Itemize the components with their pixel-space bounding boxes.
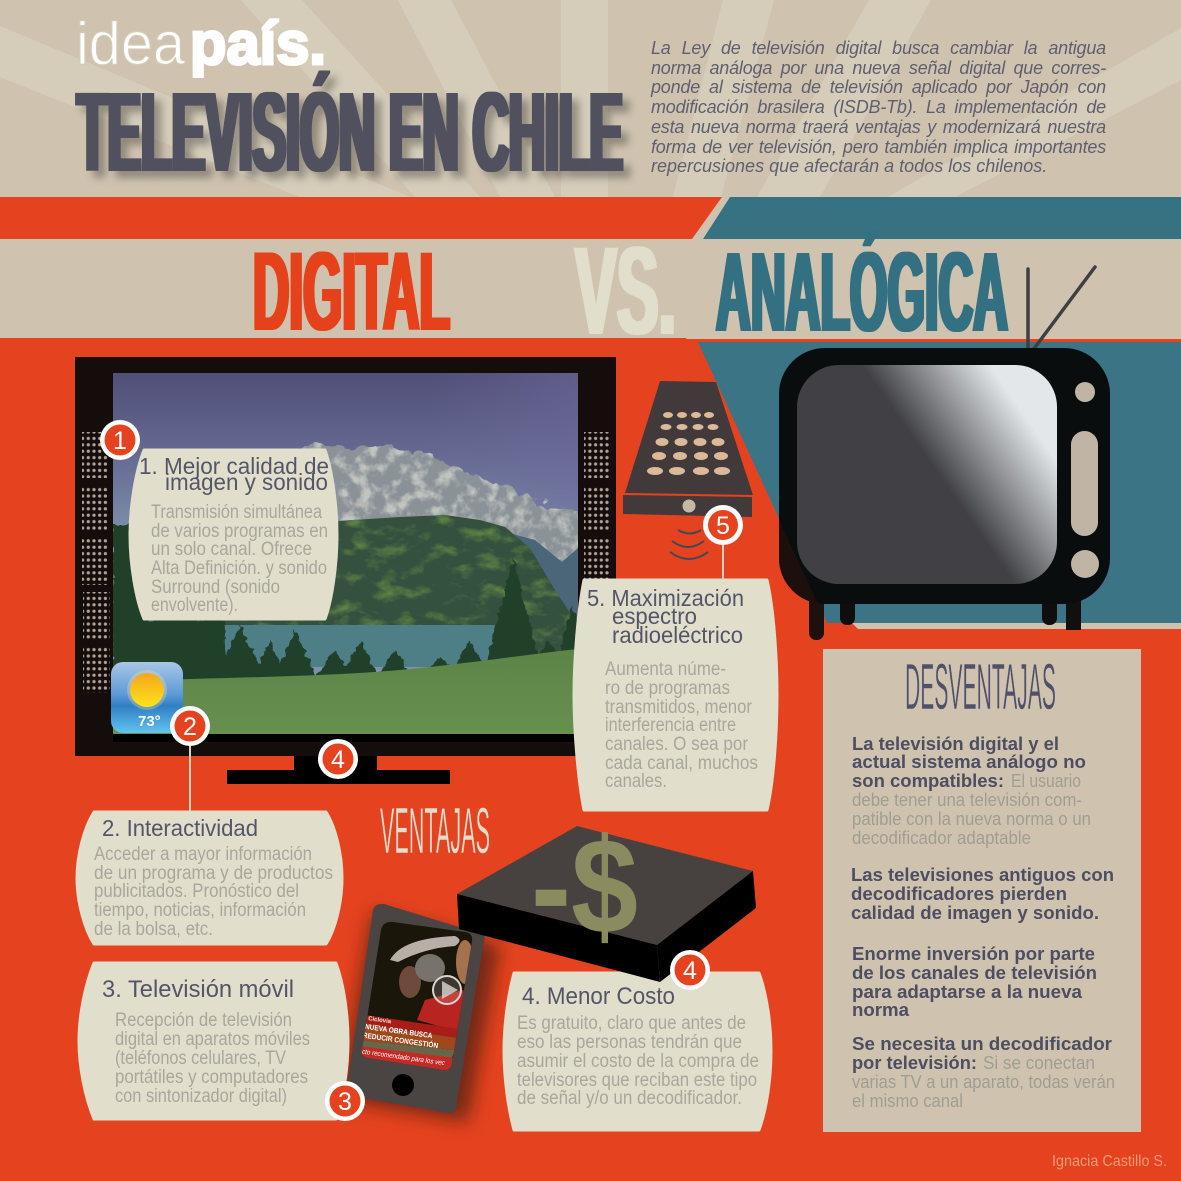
callout 5: maximizacion: canales. [605, 771, 667, 792]
callout 2: interactividad [77, 812, 342, 944]
trees [113, 525, 586, 690]
callout 3: television movil: digital en aparatos móviles [115, 1029, 310, 1050]
heading: vs: VS. [575, 222, 676, 361]
text: DIGITAL [253, 229, 450, 354]
text: compatibility: debe tener una televisión com- [852, 789, 1082, 810]
callout 2: interactividad: 2. Interactividad [102, 815, 258, 841]
phone screen video: NUEVA OBRA BUSCA [364, 1022, 434, 1040]
callout 3: television movil: 3. Televisión móvil [102, 976, 294, 1003]
icon: set-top box with price [457, 810, 756, 982]
callout 1: mejor calidad: un solo canal. Ofrece [151, 539, 312, 560]
band: orange and teal stripes [0, 197, 1181, 339]
speaker dots [82, 432, 611, 693]
callout 2: interactividad: Acceder a mayor información [94, 844, 312, 865]
text: decoder [852, 1033, 1115, 1111]
tv stand [227, 750, 450, 784]
tv body [779, 348, 1110, 604]
text: compatibility: son compatibles: [852, 770, 1004, 791]
callout 3: television movil [79, 963, 348, 1119]
tv screen landscape [113, 373, 590, 734]
lake [225, 625, 515, 667]
icon: mobile phone [340, 904, 500, 1122]
intro paragraph [650, 38, 1106, 176]
callout 5: maximizacion: ro de programas [605, 678, 730, 699]
mountain [113, 515, 578, 655]
callout 5: maximizacion: interferencia entre [605, 715, 736, 736]
callout 1: mejor calidad: 1. Mejor calidad de [139, 453, 329, 479]
callout 3: television movil: con sintonizador digital) [115, 1086, 287, 1107]
text: compatibility: actual sistema análogo no [852, 751, 1086, 772]
callout 4: menor costo: de señal y/o un decodificador. [517, 1088, 742, 1109]
callout 3: television movil: Recepción de televisión [115, 1010, 292, 1031]
badge 4 on box: 4 [683, 957, 697, 985]
intro paragraph: ponde al sistema de televisión aplicado por Japón con [651, 77, 1106, 97]
text: investment: Enorme inversión por parte [852, 943, 1095, 964]
intro paragraph: forma de ver televisión, pero también implica importantes [651, 137, 1106, 157]
logo: ideapaís: país. [190, 10, 326, 77]
intro paragraph: La Ley de televisión digital busca cambiar la antigua [651, 38, 1106, 58]
badge 5 [703, 505, 743, 545]
meadow [113, 649, 578, 734]
panel: desventajas [823, 649, 1141, 1132]
tv screen [797, 365, 1057, 584]
text: compatibility: La televisión digital y el [852, 733, 1059, 754]
remote signal waves [670, 530, 708, 559]
callout 4: menor costo: televisores que reciban este tipo [517, 1070, 757, 1091]
callout 5: maximizacion: transmitidos, menor [605, 697, 753, 718]
text: decoder: el mismo canal [852, 1090, 963, 1111]
text: image quality: calidad de imagen y sonido. [851, 902, 1099, 923]
text: decoder: por televisión: [852, 1052, 977, 1073]
callout 5: maximizacion: canales. O sea por [605, 734, 749, 755]
callout 4: menor costo: eso las personas tendrán que [517, 1032, 742, 1053]
callout 5: maximizacion: 5. Maximización [587, 585, 744, 611]
callout 2: interactividad: publicitados. Pronóstico del [94, 881, 299, 902]
callout 1: mejor calidad: imagen y sonido [165, 469, 328, 495]
clouds [302, 442, 578, 560]
callout 2: interactividad: tiempo, noticias, información [94, 900, 306, 921]
intro paragraph: esta nueva norma traerá ventajas y modernizará nuestra [651, 117, 1106, 137]
callout 4: menor costo: 4. Menor Costo [522, 983, 675, 1010]
badge 3 [325, 1081, 365, 1121]
callout 5: maximizacion [574, 580, 777, 810]
phone screen video: yecto recomendado para los vec [354, 1048, 446, 1067]
text: investment: norma [852, 999, 910, 1020]
icon: retro television [770, 267, 1110, 640]
badge 4 on tv: 4 [331, 746, 345, 774]
credit: Ignacia Castillo S. [1052, 1153, 1167, 1170]
icon: set-top box with price: -$ [531, 810, 638, 962]
badge 5: 5 [716, 512, 730, 540]
badge 4 on box [670, 950, 710, 990]
text: decoder: varias TV a un aparato, todas verán [852, 1071, 1115, 1092]
text: investment [852, 943, 1097, 1020]
tv legs [809, 590, 1081, 640]
icon: weather widget: 73° [138, 713, 161, 730]
callout 3: television movil: (teléfonos celulares, TV [115, 1048, 286, 1069]
callout 4: menor costo: asumir el costo de la compra de [517, 1051, 759, 1072]
badge 3: 3 [338, 1088, 352, 1116]
icon: weather widget [111, 662, 183, 733]
intro paragraph: norma análoga por una nueva señal digital que corres- [651, 58, 1106, 78]
badge 4 on tv [318, 739, 358, 779]
badge 1: 1 [113, 427, 127, 455]
callout 1: mejor calidad: Transmisión simultánea [151, 502, 322, 523]
intro paragraph: repercusiones que afectarán a todos los chilenos. [651, 156, 1047, 176]
header band [0, 0, 1181, 197]
background: orange and teal panels [0, 338, 1181, 1181]
callout 4: menor costo: Es gratuito, claro que antes de [517, 1013, 746, 1034]
text: investment: de los canales de televisión [852, 962, 1097, 983]
connector lines [190, 545, 723, 812]
callout 1: mejor calidad: Surround (sonido [151, 577, 280, 598]
badge 2 [170, 706, 210, 746]
phone screen video: REDUCIR CONGESTIÓN [362, 1031, 439, 1050]
icon: flat screen television [75, 357, 616, 784]
tv knobs [1071, 382, 1099, 578]
callout 5: maximizacion: radioeléctrico [612, 622, 743, 648]
text: decoder: Se necesita un decodificador [852, 1033, 1112, 1054]
intro paragraph: modificación brasilera (ISDB-Tb). La implementación de [651, 97, 1106, 117]
tv frame [75, 357, 616, 756]
callout 3: television movil: portátiles y computadores [115, 1067, 308, 1088]
phone screen video: Ciclovia [368, 1016, 392, 1025]
antennas [1028, 267, 1095, 350]
logo: ideapaís [76, 10, 326, 77]
play button [433, 976, 461, 1004]
badge 1 [100, 420, 140, 460]
text: image quality [851, 864, 1114, 923]
callout 2: interactividad: de un programa y de productos [94, 863, 333, 884]
callout 5: maximizacion: espectro [612, 603, 697, 629]
callout 5: maximizacion: Aumenta núme- [605, 659, 726, 680]
logo: ideapaís: idea [76, 10, 186, 77]
text: compatibility: decodificador adaptable [852, 827, 1031, 848]
text: compatibility [852, 733, 1091, 848]
badge 2: 2 [183, 713, 197, 741]
callout 4: menor costo [504, 973, 771, 1130]
text: image quality: decodificadores pierden [851, 883, 1067, 904]
text: compatibility: El usuario [1011, 770, 1081, 791]
callout 1: mejor calidad [130, 450, 337, 619]
text: VENTAJAS [380, 794, 490, 867]
callout 5: maximizacion: cada canal, muchos [605, 753, 758, 774]
text: compatibility: patible con la nueva norma o un [852, 808, 1091, 829]
callout 1: mejor calidad: Alta Definición. y sonido [151, 558, 327, 579]
text: image quality: Las televisiones antiguos con [851, 864, 1114, 885]
text: decoder: Si se conectan [983, 1052, 1095, 1073]
text: investment: para adaptarse a la nueva [852, 981, 1083, 1002]
icon: remote control [623, 381, 753, 559]
remote buttons [647, 412, 730, 475]
callout 1: mejor calidad: envolvente). [151, 595, 238, 616]
callout 1: mejor calidad: de varios programas en [151, 521, 328, 542]
phone screen video [362, 922, 472, 1070]
callout 2: interactividad: de la bolsa, etc. [94, 919, 213, 940]
